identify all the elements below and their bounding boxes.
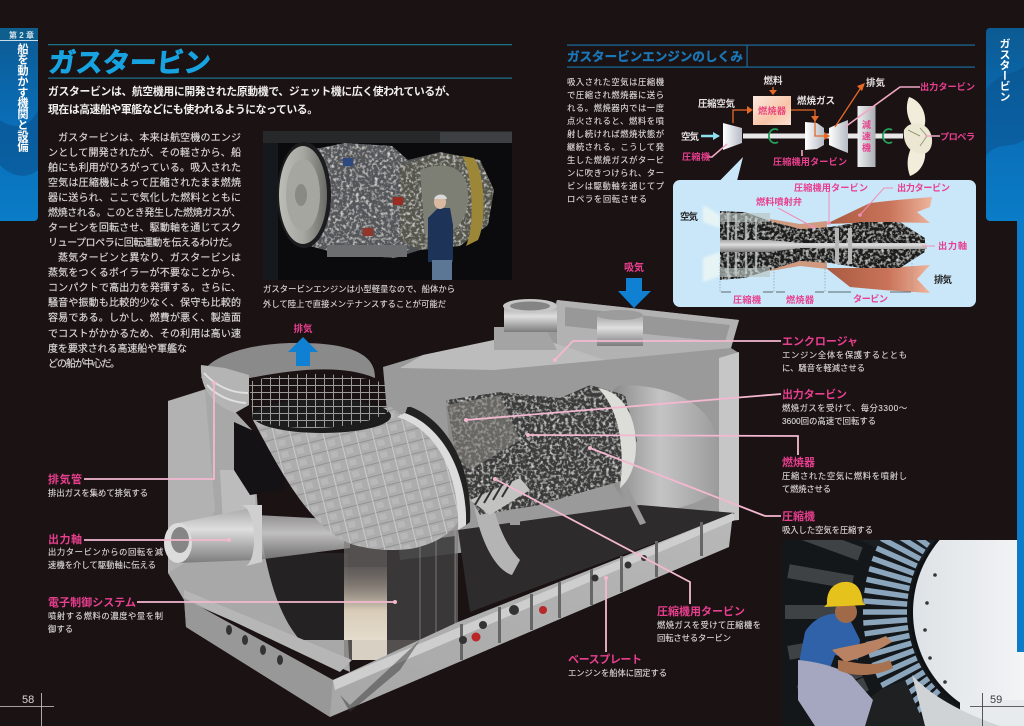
- callout: electronic control system: 噴射する燃料の濃度や量を制: [48, 611, 163, 621]
- left chapter tab: 船を動かす機関と設備: [16, 42, 29, 153]
- schematic diagram: [681, 75, 975, 176]
- leader: enclosure: [553, 341, 781, 362]
- photo caption: [263, 284, 455, 309]
- section heading: engine mechanism: ガスタービンエンジンのしくみ: [567, 49, 743, 64]
- panel: engine cutaway: タービン: [853, 293, 888, 304]
- page number 58: 58: [22, 694, 34, 706]
- callout: base plate: ベースプレート: [568, 653, 642, 666]
- mechanism description: 継続される。こうして発: [567, 142, 665, 152]
- callout: compressor turbine: 圧縮機用タービン: [657, 604, 745, 618]
- base plate: [184, 513, 733, 717]
- photo: worker at turbine blades: [785, 540, 1024, 726]
- section ranges: [720, 263, 912, 293]
- floor: [458, 505, 735, 612]
- arrow: exhaust: 排気: [293, 323, 313, 335]
- right blue edge strip: [1017, 221, 1024, 652]
- right section tab: [986, 28, 1024, 221]
- mechanism description: 点火されると、燃料を噴: [567, 116, 665, 126]
- mechanism description: [567, 77, 665, 204]
- page number 59: 59: [990, 694, 1002, 706]
- panel: engine cutaway: 出力軸: [938, 240, 967, 251]
- rear enclosure: [383, 300, 739, 560]
- callout: power turbine: 3600回の高速で回転する: [782, 416, 876, 426]
- body text: ガスタービンは、本来は航空機のエンジ: [58, 131, 241, 144]
- callout: power turbine: 出力タービン: [782, 387, 847, 401]
- callout: compressor turbine: 回転させるタービン: [657, 633, 731, 643]
- inlet cylinders: [504, 306, 557, 332]
- callout: enclosure: に、騒音を軽減させる: [782, 363, 865, 373]
- body text: 度を要求される高速船や軍艦な: [48, 342, 187, 355]
- body text: タービンを回転させ、駆動軸を通じてスク: [48, 221, 241, 234]
- air streaks: [703, 205, 720, 282]
- body text: 容易である。しかし、燃費が悪く、製造面: [48, 311, 241, 324]
- body text: どの船が中心だ。: [48, 357, 120, 370]
- callout: exhaust pipe: 排出ガスを集めて排気する: [48, 488, 148, 498]
- page number 58: [0, 693, 54, 726]
- mechanism description: れる。燃焼器内では一度: [567, 103, 664, 113]
- gas turbine engine core: [446, 385, 637, 515]
- electronic control system: [344, 530, 458, 660]
- callout: output shaft: 出力タービンからの回転を減: [48, 547, 164, 557]
- exhaust mouth: [253, 399, 391, 433]
- left chapter tab: [0, 28, 38, 221]
- callout: power turbine: [782, 387, 907, 426]
- mechanism description: で圧縮され燃焼器に送ら: [567, 90, 664, 100]
- mechanism description: ビンは駆動軸を通じてプ: [567, 181, 665, 191]
- panel: engine cutaway: 排気: [934, 274, 952, 286]
- callout: compressor turbine: [657, 604, 761, 643]
- intake volute: [603, 385, 718, 511]
- leader: output shaft: [84, 538, 231, 542]
- 3D cutaway illustration of gas turbine module: [164, 299, 739, 717]
- body text: [48, 131, 241, 370]
- photo caption: ガスタービンエンジンは小型軽量なので、船体から: [263, 284, 455, 294]
- callout: enclosure: エンクロージャ: [782, 335, 858, 348]
- callout: enclosure: [782, 335, 907, 373]
- mechanism description: 射し続ければ燃焼状態が: [567, 129, 665, 139]
- body text: ンとして開発されたが、その軽さから、船: [48, 146, 241, 159]
- body text: 蒸気タービンと異なり、ガスタービンは: [58, 251, 241, 264]
- schematic diagram: 空気: [681, 131, 699, 143]
- leader: compressor: [588, 446, 781, 516]
- duct flange ring: [397, 413, 466, 530]
- callout: output shaft: 速機を介して駆動軸に伝える: [48, 560, 156, 570]
- schematic diagram: 圧縮機用タービン: [773, 156, 847, 167]
- engine supports: [510, 470, 646, 525]
- mechanism description: ンに吹きつけられ、ター: [567, 168, 664, 178]
- cutaway engine: [720, 197, 932, 293]
- photo caption: 外して陸上で直接メンテナンスすることが可能だ: [263, 299, 446, 309]
- output shaft: [178, 507, 256, 563]
- body text: 器に送られ、ここで気化した燃料とともに: [48, 191, 241, 204]
- dark opening: [265, 553, 348, 640]
- callout: combustor: [782, 455, 907, 494]
- arrow: intake: [618, 261, 651, 308]
- panel: engine cutaway: 燃焼器: [786, 294, 815, 305]
- lead paragraph: ガスタービンは、航空機用に開発された原動機で、ジェット機に広く使われているが、: [48, 84, 456, 98]
- body text: でコストがかかるため、その利用は高い速: [48, 327, 241, 340]
- body text: コンパクトで高出力を発揮する。さらに、: [48, 281, 241, 294]
- mechanism description: 吸入された空気は圧縮機: [567, 77, 665, 87]
- mechanism description: 生した燃焼ガスがタービ: [567, 155, 664, 165]
- leader: exhaust pipe: [84, 381, 216, 479]
- right section tab: ガスタービン: [998, 38, 1010, 102]
- panel: engine cutaway: 空気: [680, 211, 698, 223]
- schematic diagram: 出力タービン: [920, 81, 975, 92]
- arrow: exhaust: [288, 323, 318, 366]
- callout: power turbine: 燃焼ガスを受けて、毎分3300～: [782, 403, 907, 413]
- schematic diagram: 燃焼ガス: [797, 95, 835, 107]
- body text: 燃焼される。このとき発生した燃焼ガスが、: [48, 206, 241, 219]
- callout: output shaft: [48, 532, 164, 570]
- body text: 騒音や振動も比較的少なく、保守も比較的: [48, 296, 241, 309]
- callout: exhaust pipe: 排気管: [48, 472, 82, 486]
- leader: electronic control: [137, 600, 397, 604]
- lead paragraph: [48, 84, 456, 116]
- callout: enclosure: エンジン全体を保護するととも: [782, 350, 907, 360]
- schematic diagram: 圧縮空気: [698, 98, 735, 110]
- leader: combustor: [526, 433, 798, 455]
- body text: 舶にも利用がひろがっている。吸入された: [48, 161, 241, 174]
- page number 59: [970, 693, 1024, 726]
- worker: [798, 582, 893, 726]
- arrow: intake: 吸気: [624, 261, 644, 274]
- leader: power turbine: [464, 394, 781, 422]
- schematic diagram: 燃料: [763, 75, 783, 87]
- callout: combustor: 圧縮された空気に燃料を噴射し: [782, 471, 907, 481]
- internal pink leaders: [778, 188, 935, 246]
- exhaust duct: [253, 407, 462, 550]
- callout: compressor: [782, 509, 873, 535]
- callout: base plate: [568, 653, 667, 678]
- title block: ガスタービン: [47, 48, 212, 78]
- right pillar: [719, 352, 739, 520]
- panel: engine cutaway: 圧縮機用タービン: [794, 182, 868, 193]
- schematic diagram: プロペラ: [940, 132, 975, 142]
- panel: engine cutaway: 圧縮機: [733, 294, 762, 305]
- body text: 空気は圧縮機によって圧縮されたまま燃焼: [48, 176, 241, 189]
- callout: output shaft: 出力軸: [48, 532, 82, 546]
- schematic diagram: 圧縮機: [682, 151, 711, 162]
- callout: electronic control system: 御する: [48, 624, 73, 634]
- callout: compressor: 圧縮機: [782, 509, 815, 523]
- callout: compressor turbine: 燃焼ガスを受けて圧縮機を: [657, 620, 761, 630]
- callout: exhaust pipe: [48, 472, 148, 498]
- body text: リュープロペラに回転運動を伝えるわけだ。: [48, 236, 238, 249]
- callout: combustor: 燃焼器: [782, 455, 815, 469]
- left wall: [168, 387, 350, 672]
- photo: gas turbine engine with technician: [263, 131, 512, 280]
- panel: engine cutaway: 出力タービン: [897, 182, 950, 193]
- panel: engine cutaway: 燃料噴射弁: [756, 196, 802, 207]
- mechanism description: ロペラを回転させる: [567, 194, 647, 204]
- lead paragraph: 現在は高速船や軍艦などにも使われるようになっている。: [48, 102, 318, 116]
- panel: engine cutaway: [673, 157, 976, 307]
- schematic diagram: 燃焼器: [758, 105, 787, 116]
- callout: electronic control system: 電子制御システム: [48, 595, 136, 609]
- schematic diagram: 排気: [866, 77, 886, 89]
- left chapter tab: 第2章: [9, 30, 34, 40]
- callout: combustor: て燃焼させる: [782, 484, 831, 494]
- body text: 蒸気をつくるボイラーが不要なことから、: [48, 266, 241, 279]
- schematic diagram: 減速機: [861, 119, 871, 153]
- callout: base plate: エンジンを船体に固定する: [568, 668, 667, 678]
- callout: compressor: 吸入した空気を圧縮する: [782, 525, 873, 535]
- callout: electronic control system: [48, 595, 163, 634]
- leader: base plate: [604, 576, 608, 652]
- leader: compressor turbine: [493, 477, 690, 604]
